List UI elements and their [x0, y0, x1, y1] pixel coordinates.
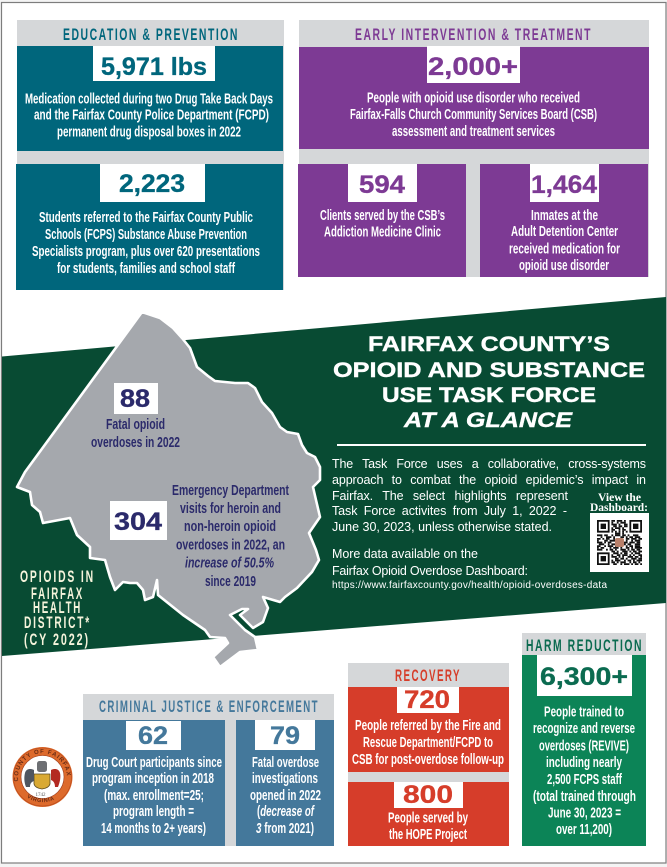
text: medication collected: and the Fairfax County Police Department (FCPD) — [34, 108, 269, 124]
text: medication collected: Medication collected during two Drug Take Back Days — [25, 92, 273, 108]
text: task force description — [332, 457, 646, 534]
text: fatal opioid overdoses: overdoses in 2022 — [91, 435, 180, 451]
label: opioids in Fairfax Health District — [20, 567, 95, 649]
text: students referred: Specialists program, plus over 620 presentations — [32, 244, 260, 260]
title: OPIOID AND SUBSTANCE — [333, 358, 645, 382]
text: students referred — [32, 210, 260, 277]
text: clients served: Clients served by the CSB’s — [320, 208, 445, 224]
heading: recovery: RECOVERY — [395, 666, 461, 685]
text: HOPE project: the HOPE Project — [389, 827, 467, 843]
text: dashboard link: More data available on the — [332, 547, 478, 561]
text: fatal overdose investigations: opened in 2022 — [250, 788, 321, 804]
stat: 720: 720 — [404, 686, 450, 714]
text: dashboard link — [332, 547, 607, 591]
text: drug court participants: Drug Court participants since — [86, 755, 222, 771]
text: inmates: received medication for — [509, 242, 620, 258]
title: USE TASK FORCE — [382, 383, 596, 407]
text: clients served — [320, 208, 445, 240]
text: drug court participants — [86, 755, 222, 837]
icon: Fairfax County seal: COUNTY OF FAIRFAX — [14, 749, 71, 782]
label: opioids in Fairfax Health District: FAIRFAX — [31, 584, 84, 603]
label: opioids in Fairfax Health District: DISTRICT* — [24, 613, 91, 632]
text: emergency department visits — [172, 483, 289, 590]
green diagonal band — [2, 297, 666, 656]
text: emergency department visits: non-heroin opioid — [184, 519, 276, 535]
qr label: view the dashboard — [590, 492, 648, 514]
text: people referred: Rescue Department/FCPD to — [363, 735, 493, 751]
qr label: view the dashboard: Dashboard: — [590, 502, 648, 514]
title: FAIRFAX COUNTY’S — [368, 332, 610, 356]
text: fatal overdose investigations: investigations — [252, 771, 318, 787]
text: HOPE project: People served by — [388, 810, 468, 826]
text: people trained: over 11,200) — [556, 822, 612, 838]
text: task force description: June 30, 2023, unless otherwise stated. — [332, 520, 552, 534]
title: AT A GLANCE — [403, 408, 573, 432]
stat: 1,464: 1,464 — [531, 171, 597, 199]
text: inmates: opioid use disorder — [519, 258, 609, 274]
icon: Fairfax County seal — [12, 747, 72, 807]
text: fatal overdose investigations: (decrease of — [257, 804, 315, 820]
stat: 62: 62 — [138, 722, 168, 750]
text: people referred — [352, 718, 504, 768]
text: fatal overdose investigations: Fatal overdose — [252, 755, 319, 771]
stat: 2,000+: 2,000+ — [428, 53, 518, 81]
text: inmates: Adult Detention Center — [511, 224, 618, 240]
text: fatal overdose investigations — [250, 755, 321, 837]
stat: 6,300+: 6,300+ — [540, 663, 628, 691]
text: people trained — [533, 704, 636, 838]
qr label: view the dashboard: View the — [598, 492, 641, 504]
text: clients served: Addiction Medicine Clinic — [324, 224, 441, 240]
label: opioids in Fairfax Health District: HEALTH — [33, 598, 82, 617]
stat: 594: 594 — [359, 171, 405, 199]
panel: criminal justice and enforcement — [83, 694, 334, 846]
text: dashboard link: https://www.fairfaxcounty.gov/health/opioid-overdoses-data — [332, 580, 607, 591]
stat: 2,223: 2,223 — [119, 170, 185, 198]
stat: 79: 79 — [270, 722, 300, 750]
text: emergency department visits: overdoses in 2022, an — [176, 538, 285, 554]
text: medication collected — [25, 92, 273, 140]
text: students referred: Schools (FCPS) Substance Abuse Prevention — [45, 227, 247, 243]
heading: criminal justice and enforcement: CRIMINAL JUSTICE & ENFORCEMENT — [99, 697, 319, 716]
text: people trained: June 30, 2023 = — [548, 806, 621, 822]
text: people with opioid use disorder — [350, 90, 597, 140]
text: task force description: The Task Force uses a collaborative, cross-systems — [332, 457, 646, 471]
panel: education and prevention — [16, 20, 284, 290]
stat: 304: 304 — [114, 508, 162, 536]
text: task force description: approach to combat the opioid epidemic’s impact in — [332, 473, 646, 487]
heading: education and prevention: EDUCATION & PREVENTION — [63, 25, 239, 44]
title — [333, 332, 645, 432]
text: people trained: including nearly — [546, 755, 622, 771]
text: inmates — [509, 208, 620, 274]
text: dashboard link: Fairfax Opioid Overdose Dashboard: — [332, 564, 528, 578]
text: people with opioid use disorder: assessment and treatment services — [392, 124, 555, 140]
text: students referred: Students referred to the Fairfax County Public — [39, 210, 253, 226]
text: emergency department visits: increase of 50.5% — [185, 556, 274, 572]
text: students referred: for students, families and school staff — [57, 261, 235, 277]
map: Fairfax health district — [17, 312, 320, 667]
text: emergency department visits: Emergency Department — [172, 483, 289, 499]
text: people referred: CSB for post-overdose follow-up — [352, 752, 504, 768]
text: medication collected: permanent drug disposal boxes in 2022 — [57, 124, 241, 140]
text: task force description: Task Force activites from July 1, 2022 - — [332, 504, 567, 518]
panel: early intervention and treatment — [298, 20, 649, 277]
icon: QR code — [590, 513, 649, 572]
stat: 800: 800 — [403, 781, 453, 809]
stat: 88: 88 — [120, 385, 150, 413]
stat: 5,971 lbs: 5,971 lbs — [101, 53, 207, 81]
text: people trained: 2,500 FCPS staff — [547, 772, 622, 788]
text: drug court participants: 14 months to 2+ years) — [101, 821, 206, 837]
label: opioids in Fairfax Health District: (CY 2022) — [24, 630, 90, 649]
text: HOPE project — [388, 810, 468, 843]
text: emergency department visits: since 2019 — [205, 574, 256, 590]
panel: harm reduction — [522, 633, 646, 846]
text: drug court participants: program inception in 2018 — [92, 771, 214, 787]
text: emergency department visits: visits for heroin and — [180, 501, 281, 517]
text: drug court participants: (max. enrollment=25; — [104, 788, 204, 804]
text: fatal opioid overdoses: Fatal opioid — [106, 417, 165, 433]
text: task force description: Fairfax. The select highlights represent — [332, 489, 569, 503]
text: drug court participants: program length = — [113, 804, 194, 820]
text: people trained: People trained to — [544, 704, 624, 720]
text: fatal opioid overdoses — [91, 417, 180, 451]
icon: Fairfax County seal: 1742 — [36, 793, 46, 798]
panel: recovery — [348, 663, 509, 846]
label: opioids in Fairfax Health District: OPIOIDS IN — [20, 567, 95, 586]
text: fatal overdose investigations: 3 from 2021) — [256, 821, 314, 837]
text: people referred: People referred by the Fire and — [355, 718, 501, 734]
text: inmates: Inmates at the — [531, 208, 598, 224]
icon: Fairfax County seal: VIRGINIA — [28, 794, 54, 802]
